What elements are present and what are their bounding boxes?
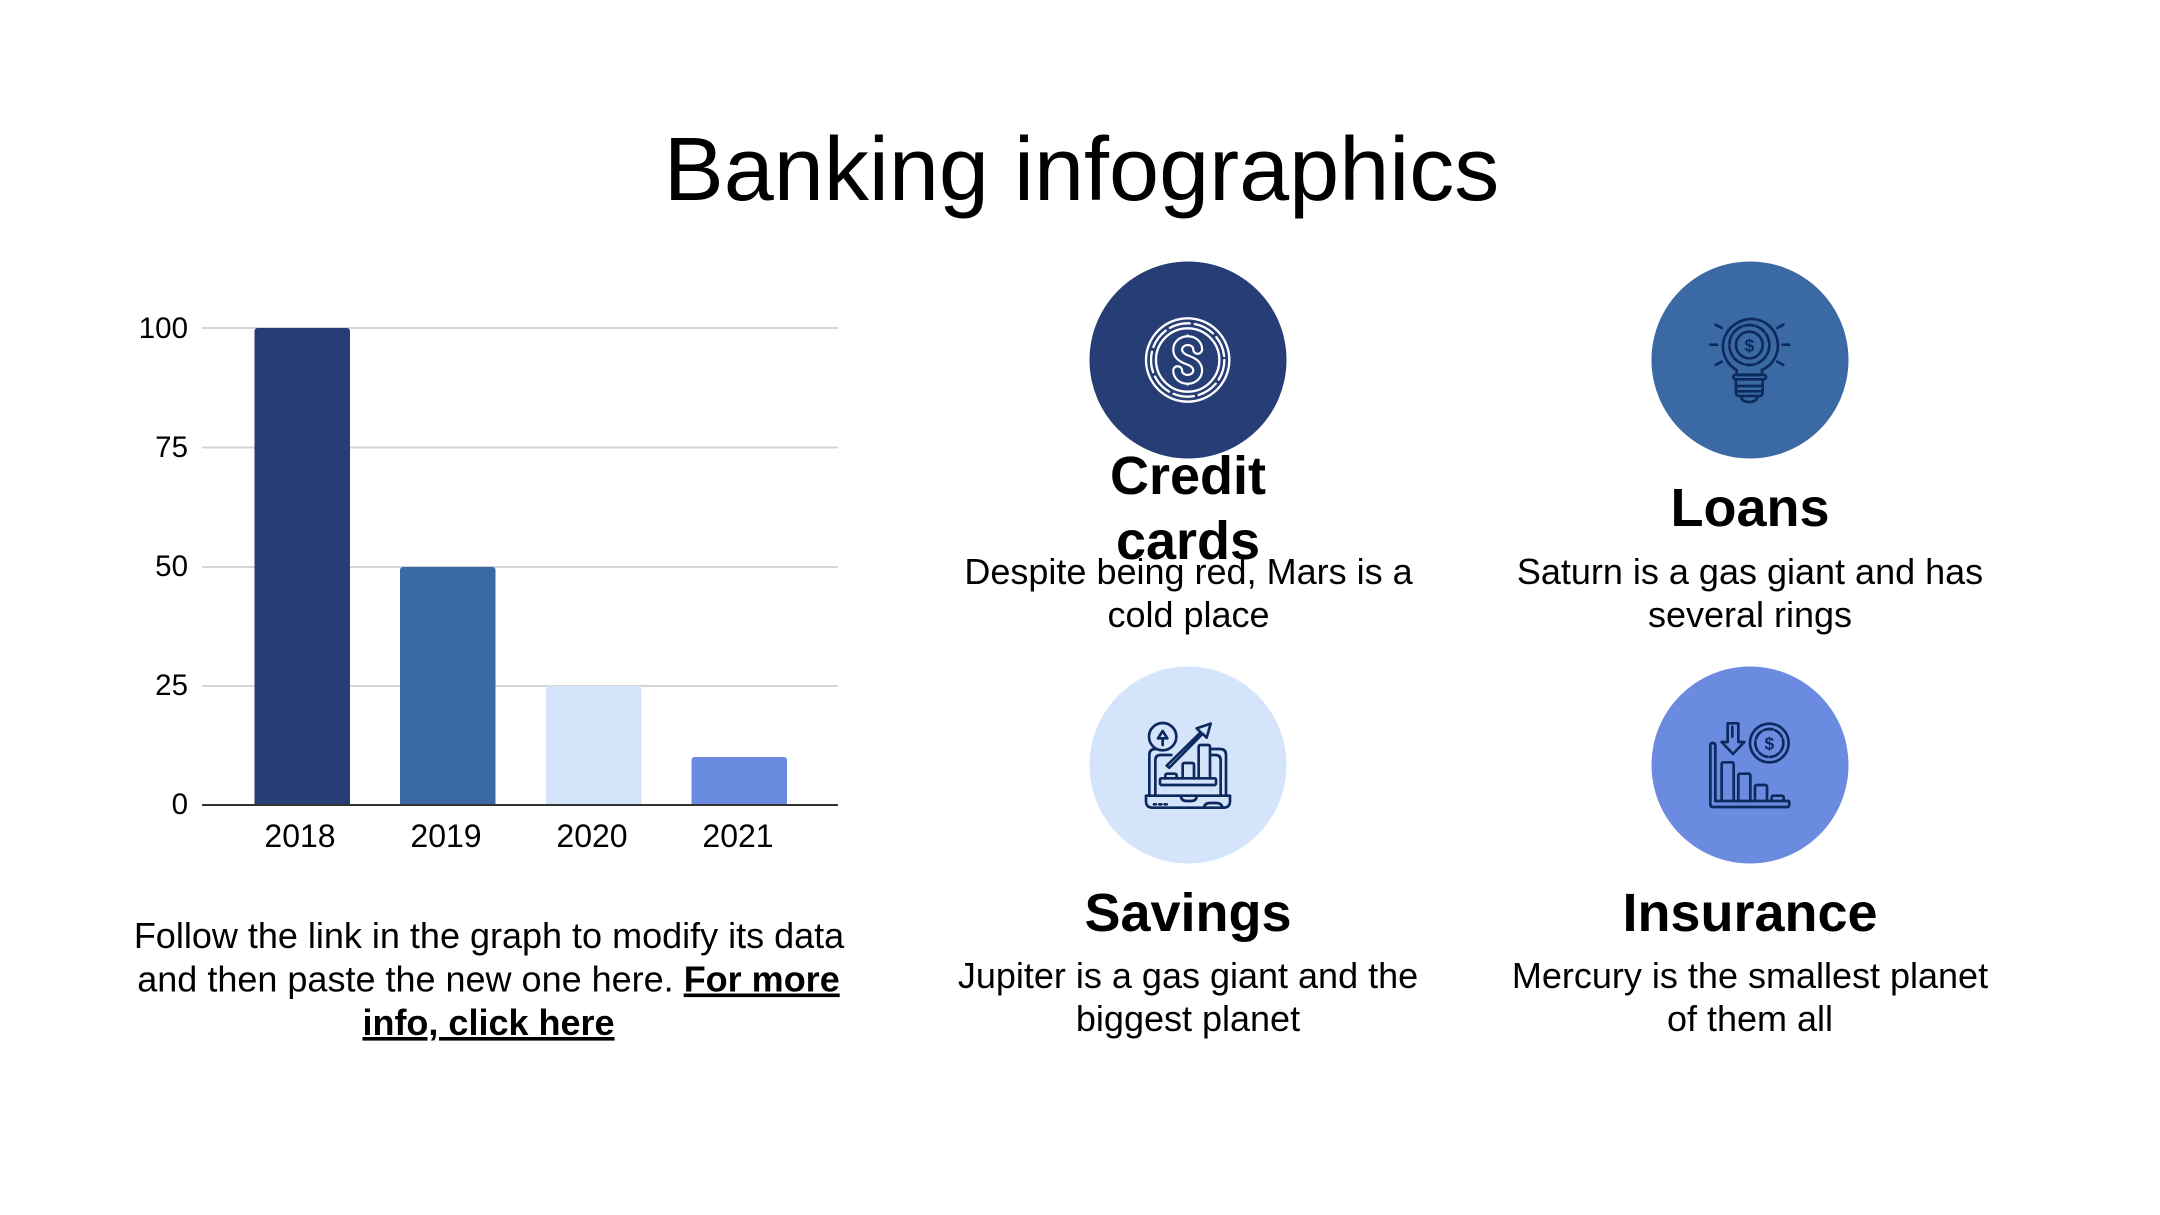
title: Banking infographics (664, 120, 1499, 220)
heading: insurance: Insurance (1622, 883, 1878, 943)
y axis labels: 0 (172, 788, 188, 821)
heading: loans: Loans (1670, 478, 1830, 538)
x axis labels (264, 818, 774, 854)
y axis labels: 75 (155, 431, 188, 464)
x axis labels: 2020 (556, 818, 628, 854)
icon: falling bar chart with coin (1652, 666, 1848, 864)
description: insurance: of them all (1667, 998, 1833, 1039)
bar: 2019 (400, 567, 496, 805)
y axis labels (139, 312, 188, 821)
y axis labels: 100 (139, 312, 188, 345)
bar: 2021 (692, 757, 787, 805)
icon: laptop with rising chart (1090, 666, 1286, 864)
x axis labels: 2018 (264, 818, 336, 854)
x axis labels: 2021 (702, 818, 774, 854)
chart caption: and then paste the new one here. For more (137, 958, 840, 1000)
icon: light bulb with dollar (1652, 262, 1848, 458)
panel: credit cards (964, 262, 1414, 635)
icon: falling bar chart with coin: $ (1765, 733, 1775, 753)
chart caption (134, 915, 845, 1043)
chart caption: info, click here (362, 1002, 615, 1043)
heading: credit cards: cards (1116, 511, 1260, 571)
description: loans: Saturn is a gas giant and has (1517, 551, 1983, 592)
heading: credit cards: Credit (1110, 446, 1266, 506)
description: loans: several rings (1648, 594, 1852, 635)
description: insurance (1512, 955, 1988, 1039)
description: credit cards: Despite being red, Mars is a (964, 551, 1414, 592)
heading: credit cards (1110, 446, 1266, 571)
panel: loans (1517, 262, 1983, 635)
chart caption: Follow the link in the graph to modify its data (134, 915, 845, 956)
description: savings: Jupiter is a gas giant and the (958, 955, 1418, 996)
description: savings (958, 955, 1418, 1039)
description: loans (1517, 551, 1983, 635)
panel: savings (958, 666, 1418, 1039)
panel: insurance (1512, 666, 1988, 1039)
bar: 2018 (254, 328, 350, 805)
icon: light bulb with dollar: $ (1744, 335, 1754, 355)
x axis labels: 2019 (410, 818, 482, 854)
y axis labels: 50 (155, 550, 188, 583)
y axis labels: 25 (155, 669, 188, 702)
heading: savings: Savings (1084, 883, 1292, 943)
description: credit cards (964, 551, 1414, 635)
icon: dollar coin (1090, 262, 1286, 458)
description: insurance: Mercury is the smallest planet (1512, 955, 1988, 996)
bar chart (139, 312, 838, 854)
description: credit cards: cold place (1107, 594, 1270, 635)
description: savings: biggest planet (1076, 998, 1300, 1039)
bar: 2020 (546, 686, 642, 805)
